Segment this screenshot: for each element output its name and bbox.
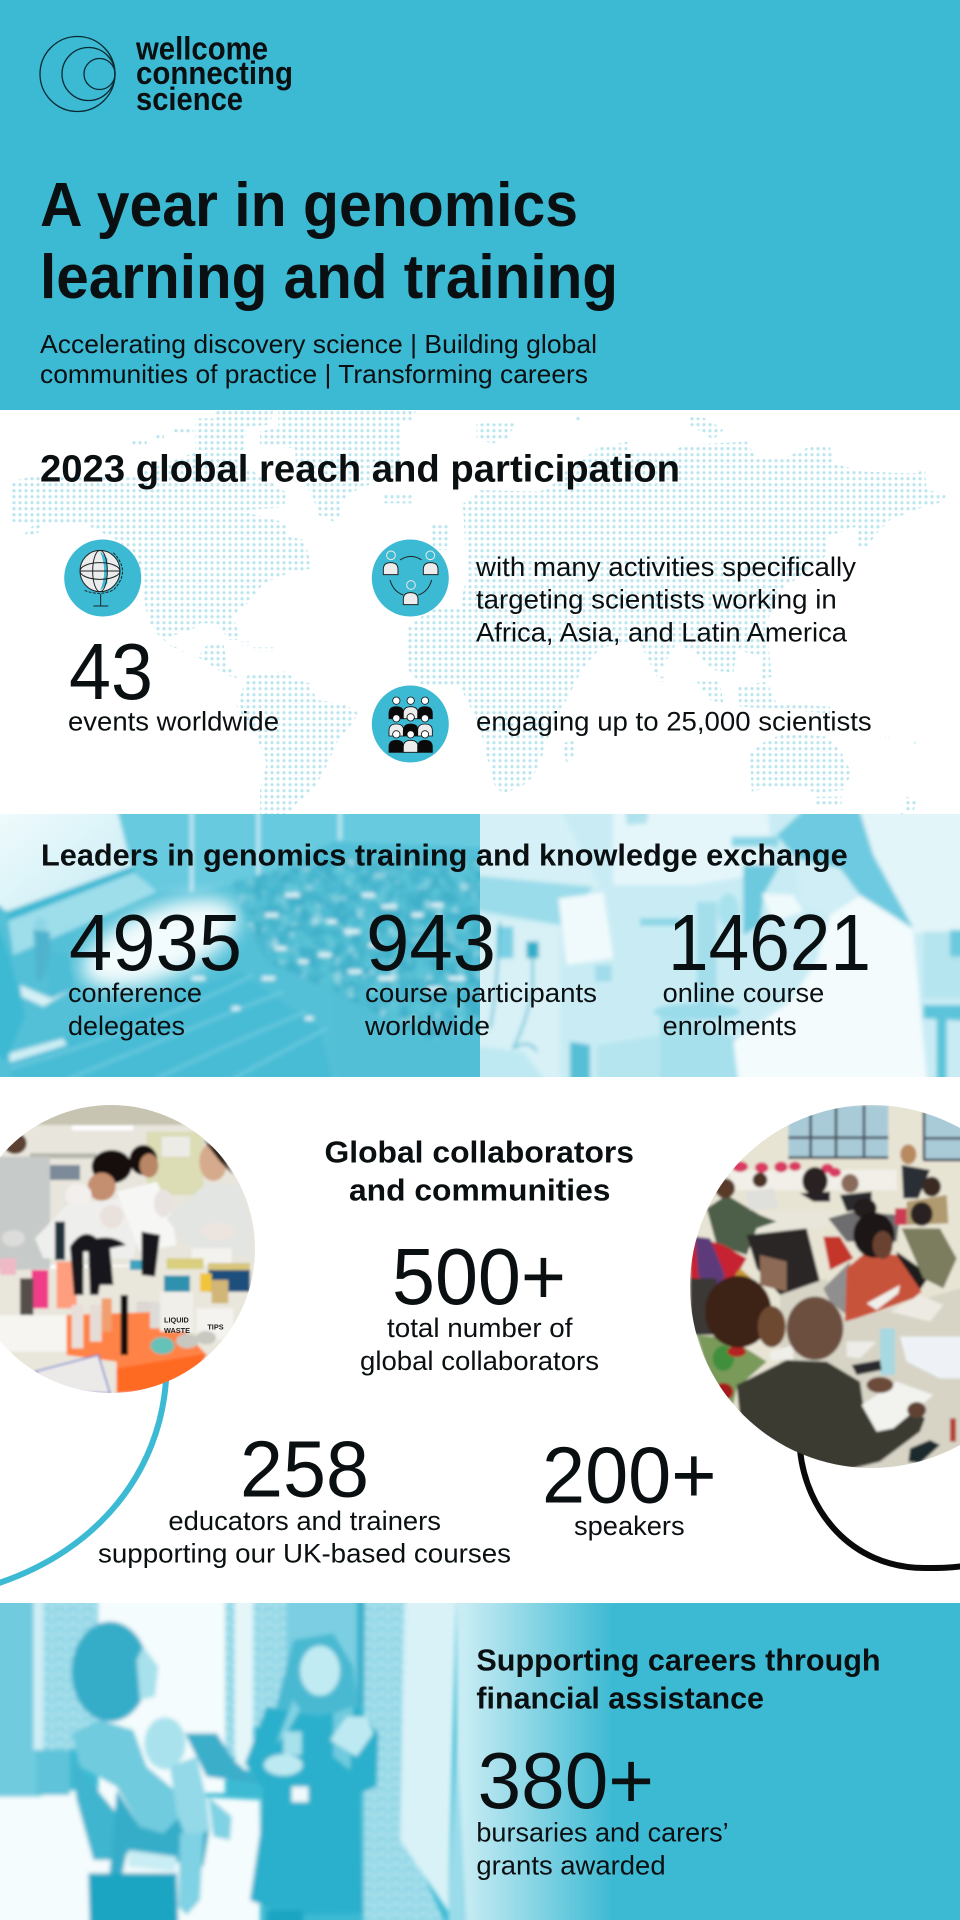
stat: 258 educators: 258 [240, 1425, 369, 1514]
stat: 380+ bursaries: grants awarded [476, 1850, 666, 1880]
title: learning and training [40, 243, 618, 312]
icon: wellcome logo rings [40, 36, 115, 112]
heading: collaborators [324, 1135, 634, 1208]
text: activities: targeting scientists working in [476, 585, 837, 615]
icon: connected people [372, 540, 449, 616]
bottle labels: LIQUID [164, 1315, 189, 1324]
title [40, 171, 618, 312]
stat: online enrolments: enrolments [663, 1011, 797, 1041]
stat: 500+ collaborators [360, 1232, 599, 1376]
heading: careers [476, 1643, 881, 1716]
stat: course participants: course participants [365, 978, 597, 1008]
bottle labels: WASTE [164, 1326, 190, 1335]
stat: 380+ bursaries: bursaries and carers’ [476, 1818, 729, 1848]
stat: conference delegates [68, 898, 242, 1041]
logo wordmark: science [136, 81, 243, 117]
photo: mother and baby with colleague [0, 1590, 642, 1920]
stat: 258 educators [98, 1425, 511, 1569]
stat: 200+ speakers: 200+ [542, 1431, 716, 1520]
heading: careers: Supporting careers through [476, 1643, 881, 1678]
stat: online enrolments: online course [663, 978, 824, 1008]
stat: conference delegates: delegates [68, 1011, 185, 1041]
logo wordmark: connecting [136, 55, 293, 91]
icon: globe [64, 540, 141, 616]
panel: header [0, 0, 960, 410]
text: engaging scientists: engaging up to 25,000 scientists [476, 707, 872, 737]
panel: supporting careers [0, 1590, 960, 1920]
stat: 200+ speakers: speakers [574, 1511, 685, 1541]
text: activities: Africa, Asia, and Latin America [476, 617, 848, 647]
heading: global reach: 2023 global reach and participation [40, 449, 680, 491]
bottle labels [164, 1318, 224, 1333]
stat: course participants: 943 [366, 898, 496, 987]
stat: online enrolments [663, 898, 871, 1041]
photo: workshop circle [690, 1105, 960, 1468]
stat: 43 events: events worldwide [68, 707, 279, 737]
stat: 258 educators: supporting our UK-based courses [98, 1539, 511, 1569]
stat: 500+ collaborators: 500+ [392, 1232, 566, 1321]
photo fade [467, 1603, 623, 1920]
stat: online enrolments: 14621 [668, 898, 871, 987]
heading: collaborators: Global collaborators [324, 1135, 634, 1170]
text: activities [475, 552, 857, 647]
stat: conference delegates: 4935 [69, 898, 242, 987]
stat: 380+ bursaries: 380+ [478, 1736, 654, 1825]
stat: 258 educators: educators and trainers [168, 1506, 441, 1536]
panel: global reach [0, 410, 960, 814]
photo: lab team circle [0, 1105, 255, 1393]
arc: blue [0, 1380, 166, 1584]
arc: black [800, 1450, 960, 1568]
text: activities: with many activities specifically [475, 552, 857, 582]
stat: course participants: worldwide [364, 1011, 490, 1041]
subtitle: communities of practice | Transforming careers [40, 359, 588, 389]
heading: collaborators: and communities [349, 1173, 610, 1208]
stat: 500+ collaborators: total number of [387, 1313, 573, 1343]
panel: global collaborators [0, 1095, 960, 1584]
heading: leaders: Leaders in genomics training and knowledge exchange [41, 838, 848, 873]
stat: 43 events: 43 [69, 627, 153, 716]
subtitle [40, 329, 597, 389]
photo: auditorium [0, 814, 480, 1077]
heading: careers: financial assistance [476, 1681, 764, 1716]
subtitle: Accelerating discovery science | Building global [40, 329, 597, 359]
logo wordmark [135, 30, 293, 117]
stat: course participants [364, 898, 597, 1041]
stat: 500+ collaborators: global collaborators [360, 1346, 599, 1376]
panel: leaders in genomics [0, 814, 960, 1077]
icon: crowd [372, 686, 449, 762]
photo: lab scientist [480, 814, 960, 1077]
stat: 43 events [68, 627, 279, 737]
logo wordmark: wellcome [135, 30, 268, 66]
stat: conference delegates: conference [68, 978, 202, 1008]
dotted world map [0, 410, 960, 814]
stat: 380+ bursaries [476, 1736, 729, 1880]
bottle labels: TIPS [207, 1322, 224, 1331]
title: A year in genomics [40, 171, 578, 240]
